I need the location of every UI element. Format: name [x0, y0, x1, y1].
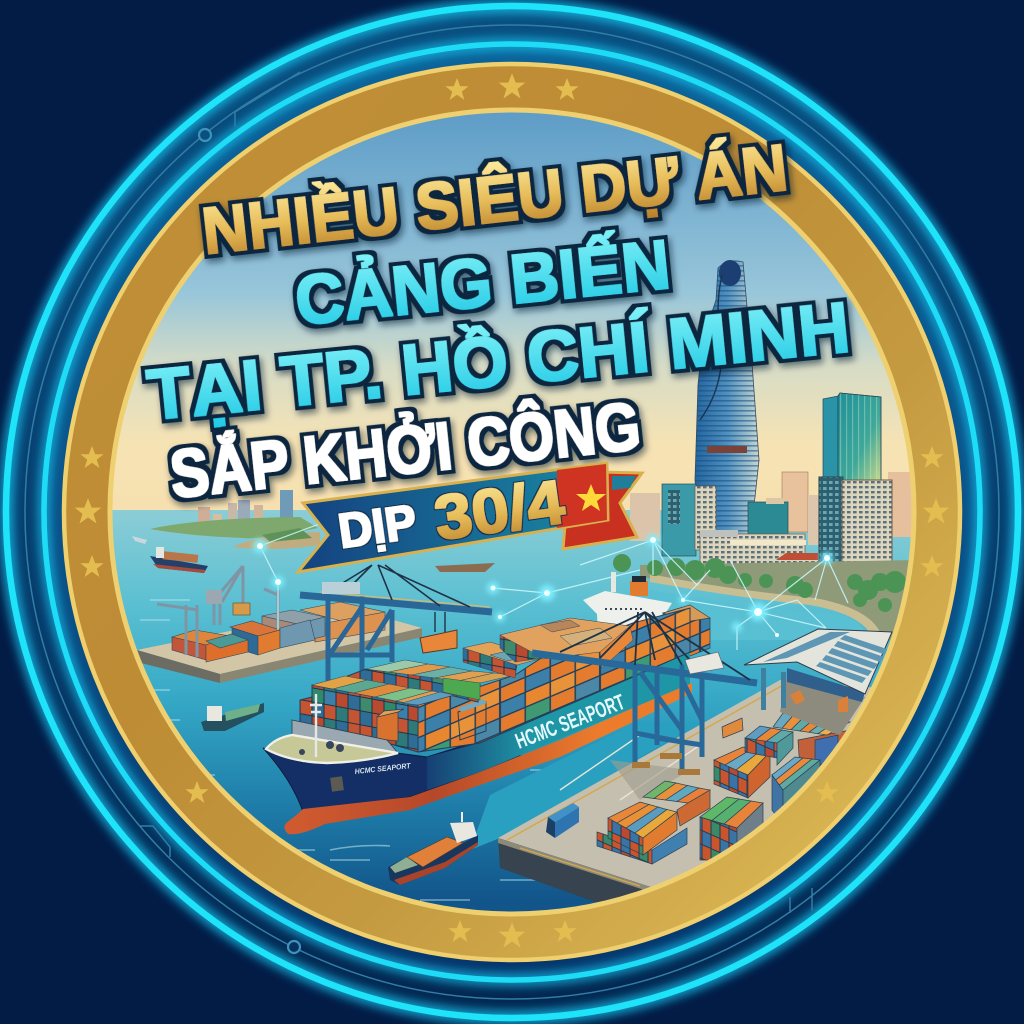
banner date: 30/4 — [430, 467, 569, 554]
rear container block — [662, 604, 711, 656]
quay container stacks — [597, 713, 850, 864]
shoreline with trees — [435, 554, 918, 640]
left office block — [662, 484, 696, 556]
stack F — [773, 713, 850, 770]
bow stack box — [377, 709, 404, 741]
left far shore city — [150, 490, 320, 549]
side wall containers — [418, 608, 690, 752]
front face containers — [300, 685, 418, 752]
bow name: HCMC SEAPORT — [354, 761, 412, 776]
block 3 — [463, 642, 543, 678]
block 2 front — [345, 669, 480, 702]
tail stripes — [612, 476, 636, 490]
crane hanging container — [420, 630, 457, 653]
stars on frame — [75, 73, 949, 947]
flag star — [576, 484, 606, 511]
reflection channel between hull and quay — [472, 740, 665, 849]
foremast — [310, 694, 322, 757]
small cargo ship bottom — [388, 812, 478, 885]
sea — [100, 510, 924, 925]
hull name: HCMC SEAPORT — [512, 689, 628, 754]
banner: dịp 30/4 — [298, 463, 642, 572]
dock cranes — [157, 566, 278, 657]
flag tail — [563, 472, 642, 549]
distant boat and far container ship — [132, 536, 208, 573]
crane cabin white — [685, 652, 724, 674]
stack A — [597, 802, 687, 864]
banner text: DỊP — [335, 496, 420, 559]
ribbon — [298, 463, 608, 572]
stack E — [745, 726, 793, 765]
anchor — [330, 776, 344, 792]
right city skyline — [630, 392, 912, 564]
digital network lines — [260, 520, 848, 650]
water waves — [140, 599, 542, 901]
stack B — [643, 781, 710, 826]
truck — [546, 803, 579, 838]
cruise superstructure behind — [583, 572, 672, 626]
stack D — [714, 747, 770, 798]
teal hull side — [427, 652, 690, 790]
left container dock — [137, 566, 422, 683]
Bitexco tower — [695, 260, 759, 542]
terminal building — [744, 629, 892, 735]
block 4 — [500, 618, 633, 668]
single box — [722, 718, 743, 738]
sky — [112, 112, 910, 510]
front gantry crane — [532, 612, 757, 772]
bow deck — [266, 735, 398, 763]
block 2 tops — [366, 660, 515, 700]
navy hull — [262, 744, 520, 810]
large crane behind ship — [300, 565, 492, 682]
crane cabin — [322, 582, 360, 594]
dock containers — [172, 602, 385, 662]
block 1 tops — [312, 676, 454, 705]
headline line 1: NHIỀU SIÊU DỰ ÁN — [198, 130, 791, 268]
main quay — [498, 680, 905, 925]
stack C — [700, 797, 763, 860]
headline line 3: TẠI TP. HỒ CHÍ MINH — [144, 289, 853, 436]
headline line 4: SẮP KHỞI CÔNG — [167, 387, 644, 513]
teal tower — [823, 393, 881, 482]
deck equipment — [299, 741, 344, 755]
headline line 2: CẢNG BIẾN — [292, 225, 674, 340]
port illustration scene — [100, 100, 924, 925]
container ship — [263, 608, 692, 834]
gold frame ring — [64, 64, 960, 960]
small tug left — [201, 703, 264, 731]
bow deck wall — [292, 720, 398, 753]
orange keel band — [284, 683, 692, 834]
network nodes — [253, 534, 833, 637]
stack G — [772, 757, 820, 825]
flag fold — [557, 464, 607, 528]
headline — [144, 130, 853, 513]
low cream building — [700, 534, 806, 564]
teal mid building — [748, 502, 788, 534]
